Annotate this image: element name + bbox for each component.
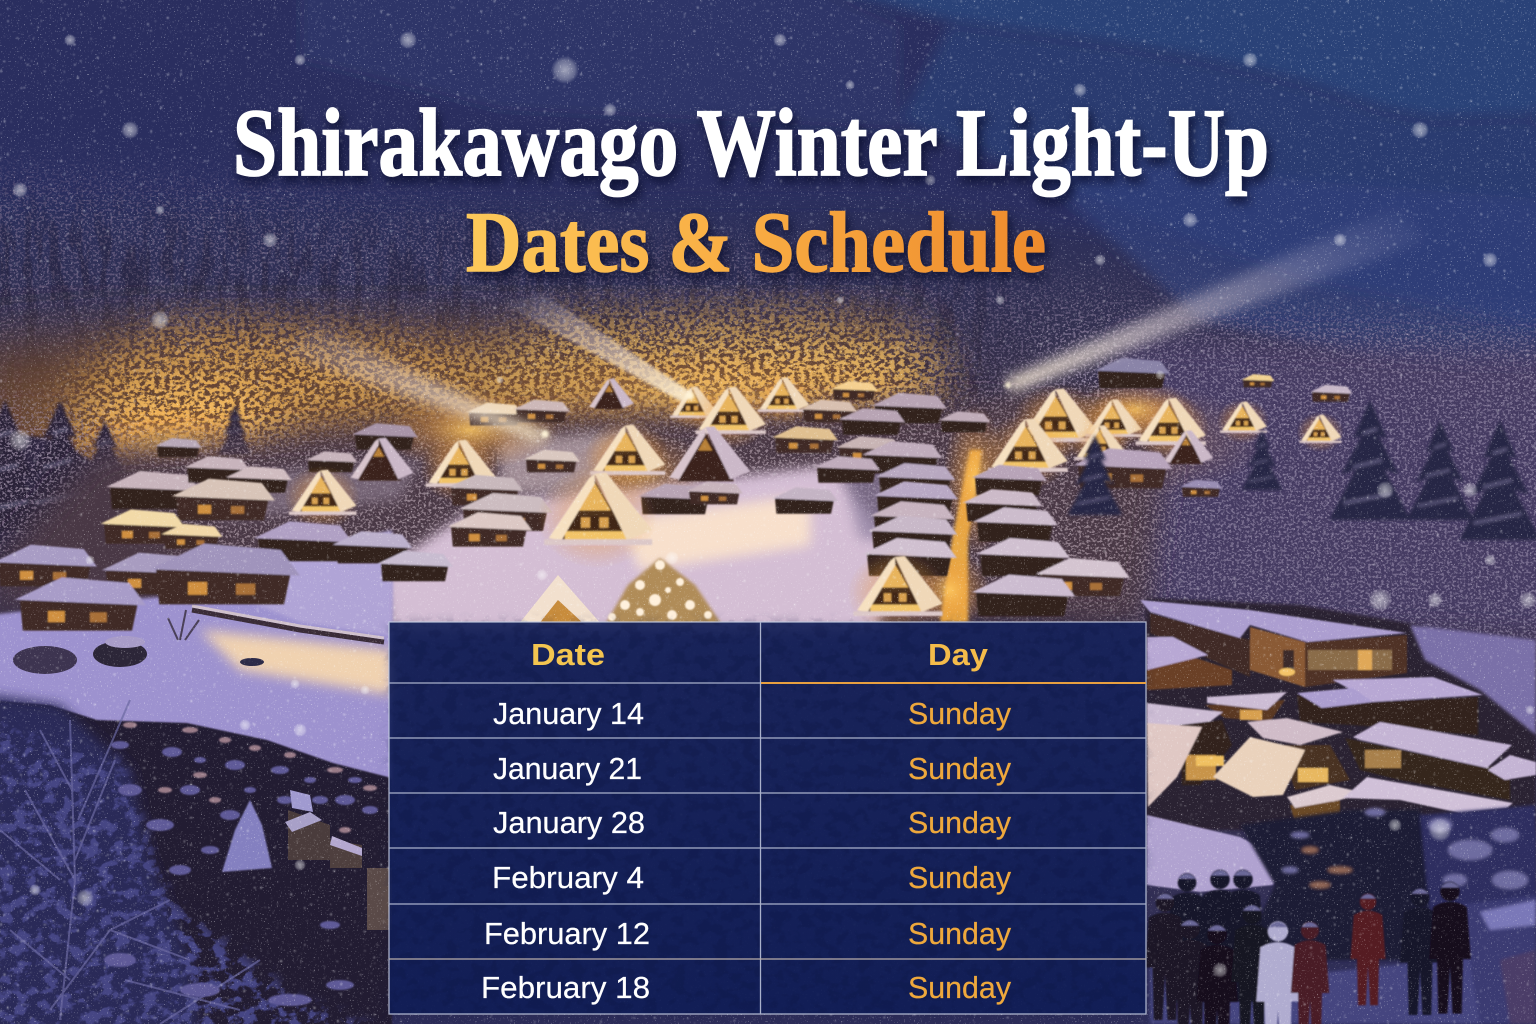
right lodges [1140, 600, 1536, 822]
row: January 28: Sunday [908, 805, 1011, 840]
table header: Date [531, 637, 605, 672]
lit trees glow [60, 345, 1270, 500]
row: February 12: Sunday [908, 916, 1011, 951]
dark trees left edge [0, 400, 252, 560]
row: January 28 [493, 805, 1011, 840]
row: February 18: February 18 [481, 970, 650, 1005]
left trees snow speckle [0, 390, 140, 580]
beam: far left [280, 328, 548, 442]
right lodges backdrop [1146, 598, 1536, 830]
row: February 4: February 4 [492, 860, 644, 895]
table grid lines [389, 622, 1146, 1014]
table panel [389, 622, 1146, 1014]
warm glows [380, 380, 1195, 630]
lit treeline centre, bright lower [620, 355, 930, 425]
lodge: side building [1147, 637, 1232, 690]
lit treeline centre, dim upper [450, 312, 950, 425]
row: February 18 [481, 970, 1011, 1005]
forest slope texture [0, 170, 1536, 580]
foreground snowy trees left [0, 695, 392, 1024]
houses: left and centre village [0, 466, 1130, 635]
right upper snow slope [1410, 625, 1536, 735]
row: February 12 [484, 916, 1011, 951]
lodge: middle buildings [1205, 677, 1483, 735]
row: February 4 [492, 860, 1011, 895]
left snow field [0, 530, 392, 790]
row: January 28: January 28 [493, 805, 645, 840]
village snow speckle [120, 400, 1180, 610]
beam: centre left [505, 292, 694, 402]
tree trunks dark streaks [0, 210, 1000, 470]
row: February 18: Sunday [908, 970, 1011, 1005]
row: January 21 [493, 751, 1011, 786]
row: January 14 [493, 696, 1011, 731]
row: February 4: Sunday [908, 860, 1011, 895]
heading: subtitle: Dates & Schedule [466, 194, 1046, 290]
title [233, 89, 1269, 290]
right hillside snow speckle [1040, 330, 1536, 660]
header accent line [761, 682, 1146, 684]
lodge: thatched houses with lit windows [1147, 703, 1513, 822]
lit treeline left, dim upper [50, 325, 520, 460]
row: January 14: January 14 [493, 696, 644, 731]
lodge: upper main building [1140, 600, 1407, 687]
row: January 21: January 21 [493, 751, 642, 786]
village base [0, 405, 1170, 625]
street lit path [940, 450, 982, 622]
village snow ground [180, 430, 900, 630]
mountains [0, 0, 1536, 400]
dark pines right of village [1068, 400, 1536, 540]
light beams [280, 205, 1425, 442]
right mauve hillside [1120, 340, 1536, 640]
table header: Day [928, 637, 989, 672]
snowy ground bottom right [1150, 895, 1536, 1024]
right dark trees [1240, 805, 1536, 960]
lodge: long right house [1345, 722, 1536, 800]
beam origin glows [541, 382, 1011, 438]
snow path right of table [1147, 815, 1290, 892]
row: February 12: February 12 [484, 916, 650, 951]
snowy tree and thatched roof above the table [518, 558, 722, 625]
table header [531, 637, 989, 672]
heading: main title: Shirakawago Winter Light-Up [233, 89, 1269, 196]
bushes in field [13, 610, 264, 674]
schedule table [389, 622, 1146, 1014]
row: January 21: Sunday [908, 751, 1011, 786]
lit treeline left, bright lower [90, 390, 290, 478]
crowd of visitors [1145, 870, 1471, 1024]
houses: back rows [106, 358, 1352, 509]
beam: right [1005, 205, 1425, 392]
table texture [389, 622, 1146, 1014]
warm forest tone [0, 330, 930, 480]
row: January 14: Sunday [908, 696, 1011, 731]
